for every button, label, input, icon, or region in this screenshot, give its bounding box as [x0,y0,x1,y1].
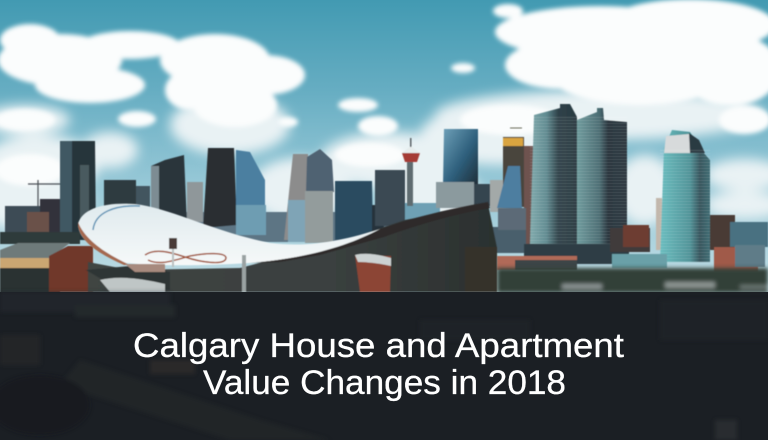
crane [28,180,60,208]
arena side red panel [355,255,391,292]
low-rise foreground buildings [490,208,765,272]
left side arena building [0,232,93,294]
roof swoosh [93,206,140,230]
background towers [5,104,768,262]
light standard [172,247,174,267]
Saddledome arena [78,202,497,292]
trees and parked cars [497,268,768,293]
title: Value Changes in 2018 [203,364,566,402]
dark title band [0,292,768,440]
arena roof [78,204,384,265]
faint darkened ground texture [0,292,768,440]
title: Calgary House and Apartment [133,327,624,365]
sky [0,0,768,300]
arena wall [88,204,497,292]
clouds [0,0,768,230]
title [133,327,624,402]
Calgary Tower [402,138,420,206]
